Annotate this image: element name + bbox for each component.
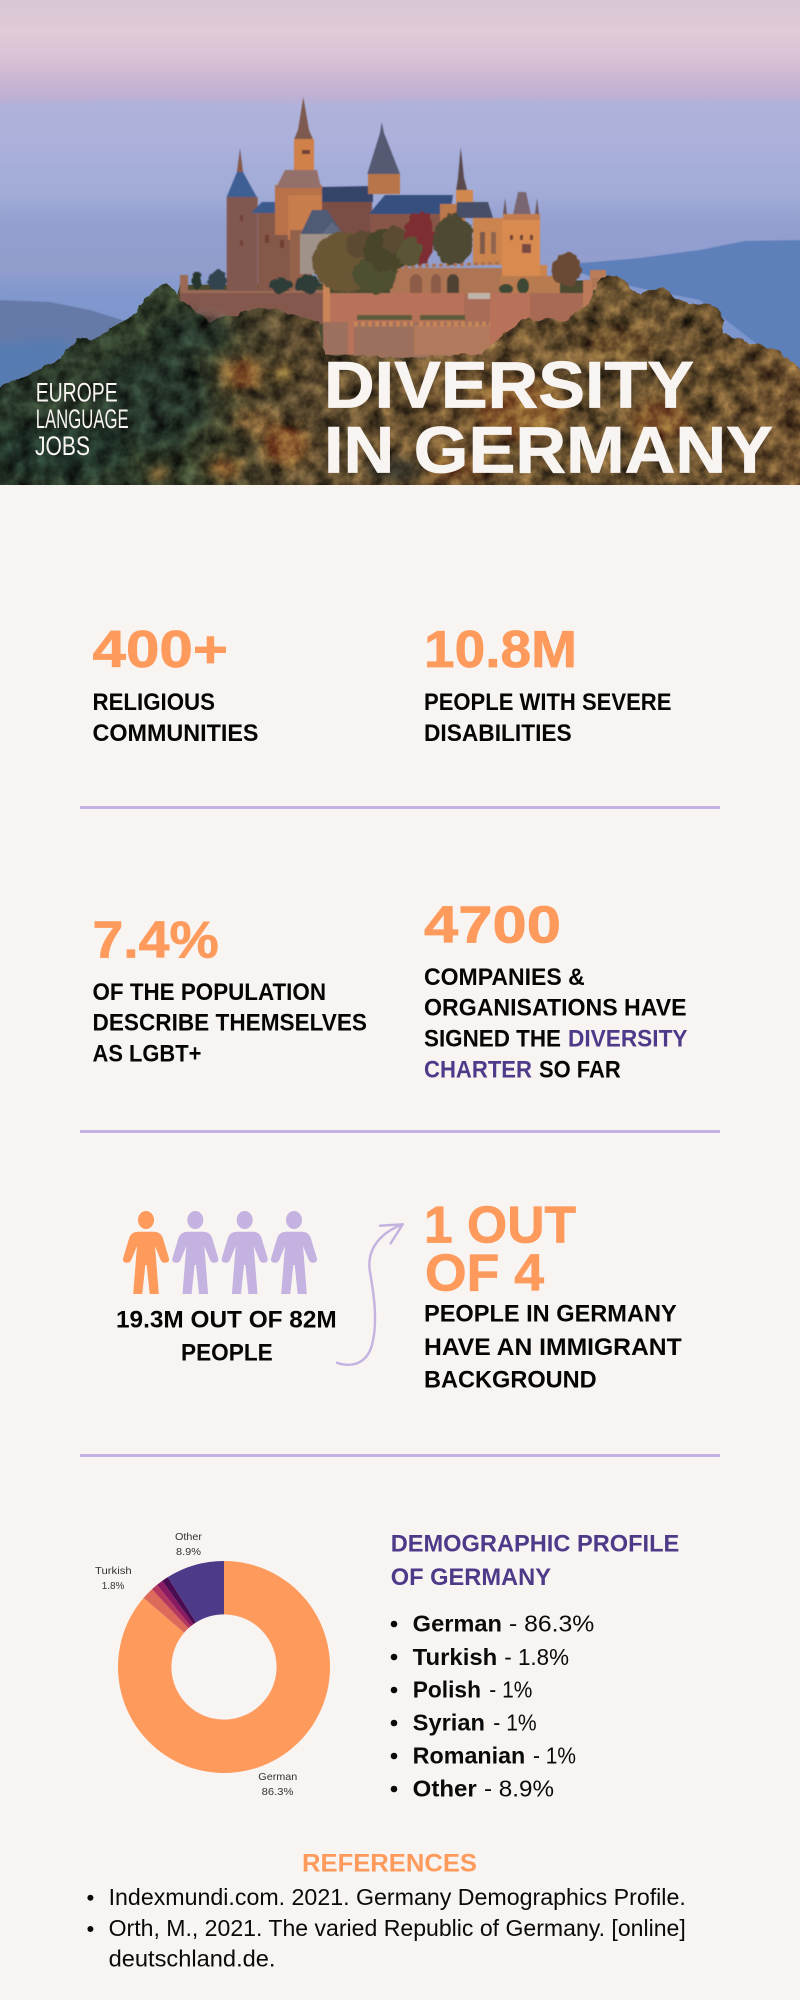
main curtain wall — [323, 270, 612, 358]
inner terrace wall — [390, 263, 560, 294]
stat: 1 out of 4: 1 OUT — [424, 1197, 576, 1255]
references list: deutschland.de. — [109, 1946, 275, 1972]
stat: 4700 companies and organisations: COMPANIES & — [424, 964, 585, 991]
demographic list: Syrian — [413, 1710, 485, 1736]
stat: 7.4% LGBT+: DESCRIBE THEMSELVES — [92, 1010, 367, 1037]
chapel — [300, 210, 343, 274]
references list: Orth, M., 2021. The varied Republic of Germany. [online] — [109, 1915, 686, 1941]
castle windows — [240, 150, 533, 248]
people caption: PEOPLE — [181, 1340, 273, 1367]
demographic list: - 1% — [533, 1743, 576, 1769]
chart label: Turkish: Turkish — [95, 1565, 132, 1577]
stat: 400+ religious communities — [92, 621, 258, 747]
donut chart: demographic profile — [95, 1531, 330, 1798]
stat: 10.8M people with severe disabilities: 10.8M — [424, 621, 577, 679]
stat: 4700 companies and organisations — [424, 896, 688, 1083]
stat: 400+ religious communities: 400+ — [92, 621, 228, 679]
stat: 7.4% LGBT+: AS LGBT+ — [92, 1041, 201, 1068]
stat: 400+ religious communities: RELIGIOUS — [92, 689, 215, 716]
demographic list: - 8.9% — [484, 1776, 554, 1802]
demographic list: Other — [413, 1776, 477, 1802]
references list — [87, 1884, 686, 1972]
title: IN GERMANY — [324, 413, 773, 487]
stat: 1 out of 4: PEOPLE IN GERMANY — [424, 1301, 677, 1328]
middle hall with blue roof — [321, 185, 454, 235]
icon: four people, one highlighted — [123, 1211, 317, 1294]
castle — [180, 97, 612, 358]
demographic list: - 1% — [493, 1710, 537, 1736]
heading: demographic profile: OF GERMANY — [391, 1564, 551, 1591]
arrow — [337, 1224, 403, 1365]
stat: 4700 companies and organisations: SO FAR — [539, 1056, 621, 1083]
chart label: Turkish: 1.8% — [102, 1580, 124, 1592]
right slim spire — [439, 148, 474, 222]
left round tower — [227, 148, 290, 291]
demographic list: - 1% — [489, 1677, 532, 1703]
stat: 4700 companies and organisations: SIGNED THE — [424, 1025, 561, 1052]
forest highlights — [148, 325, 750, 481]
distant landscape — [0, 101, 800, 345]
chart label: Turkish — [95, 1565, 132, 1592]
demographic list: Polish — [413, 1677, 481, 1703]
logo: Europe Language Jobs: EUROPE — [36, 378, 118, 408]
stat: 7.4% LGBT+: OF THE POPULATION — [92, 979, 326, 1006]
stat: 1 out of 4: BACKGROUND — [424, 1367, 597, 1394]
demographic list: Romanian — [413, 1743, 525, 1769]
demographic list — [391, 1611, 594, 1802]
stat: 4700 companies and organisations: CHARTER — [424, 1056, 532, 1083]
stat: 1 out of 4: OF 4 — [425, 1245, 544, 1303]
stat: 4700 companies and organisations: DIVERSITY — [568, 1025, 688, 1052]
people caption: 19.3M OUT OF 82M — [116, 1307, 337, 1334]
sky — [0, 0, 800, 110]
stat: 10.8M people with severe disabilities — [424, 621, 671, 747]
stat: 1 out of 4 — [424, 1197, 682, 1394]
chart label: German: German — [258, 1771, 297, 1783]
chart label: German — [258, 1771, 297, 1798]
demographic list: German — [413, 1611, 502, 1637]
demographic list: Turkish — [413, 1644, 497, 1670]
hero photo: castle on a hill at dusk — [0, 0, 800, 500]
central spire tower — [275, 97, 322, 290]
logo: Europe Language Jobs: LANGUAGE — [36, 404, 129, 434]
stat: 1 out of 4: HAVE AN IMMIGRANT — [424, 1334, 682, 1361]
left outer wall — [180, 275, 326, 324]
conical roof tower — [367, 122, 400, 194]
stat: 7.4% LGBT+: 7.4% — [92, 911, 219, 969]
logo: Europe Language Jobs — [35, 378, 129, 461]
chart label: Other: Other — [175, 1531, 203, 1543]
chart label: German: 86.3% — [262, 1786, 293, 1798]
logo: Europe Language Jobs: JOBS — [35, 431, 90, 461]
stat: 10.8M people with severe disabilities: PEOPLE WITH SEVERE — [424, 689, 671, 716]
stat: 400+ religious communities: COMMUNITIES — [92, 720, 258, 747]
right distant hill — [579, 240, 800, 370]
stat: 4700 companies and organisations: ORGANISATIONS HAVE — [424, 995, 687, 1022]
title — [324, 348, 773, 487]
demographic list: - 1.8% — [504, 1644, 569, 1670]
back forest — [177, 280, 596, 360]
forest shadows — [0, 313, 425, 482]
chart label: Other: 8.9% — [176, 1546, 201, 1558]
courtyard trees — [192, 212, 581, 293]
chart label: Other — [175, 1531, 203, 1558]
stat: 4700 companies and organisations: 4700 — [424, 896, 561, 954]
heading: demographic profile: DEMOGRAPHIC PROFILE — [391, 1531, 679, 1558]
stat: 7.4% LGBT+ — [92, 911, 367, 1068]
heading: demographic profile — [391, 1531, 679, 1591]
people caption — [116, 1307, 337, 1367]
title: DIVERSITY — [324, 348, 694, 422]
right square tower — [502, 192, 547, 280]
left distant hill — [0, 300, 128, 392]
demographic list: - 86.3% — [509, 1611, 594, 1637]
references heading: REFERENCES — [302, 1850, 477, 1878]
stat: 10.8M people with severe disabilities: DISABILITIES — [424, 720, 572, 747]
references list: Indexmundi.com. 2021. Germany Demographics Profile. — [109, 1884, 686, 1910]
right hall — [456, 202, 503, 265]
foreground forest hill — [0, 276, 800, 500]
